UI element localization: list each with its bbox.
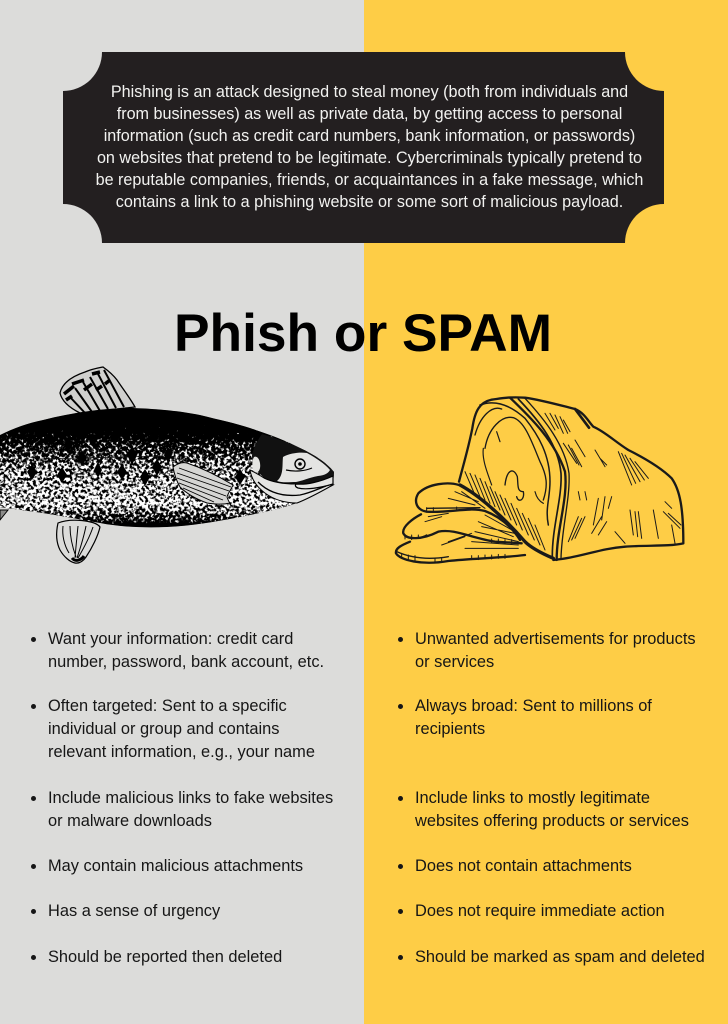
bullet: unwanted advertisements bbox=[415, 628, 696, 674]
pelvic fin bbox=[57, 520, 100, 563]
panel: spam bullet list bbox=[398, 630, 705, 966]
panel: phishing definition plaque bbox=[63, 52, 664, 243]
bullet: always broad bbox=[415, 695, 652, 741]
bullet: want your information bbox=[48, 628, 324, 674]
bullet: often targeted bbox=[48, 695, 315, 764]
icon: spam ham illustration bbox=[394, 396, 684, 564]
lateral line bbox=[40, 456, 165, 459]
pectoral fin bbox=[173, 463, 233, 504]
hatching on the side bbox=[545, 413, 681, 543]
bullet: urgency: Has a sense of urgency bbox=[48, 902, 220, 920]
bullet: unwanted advertisements: Unwanted advertisements for products bbox=[415, 630, 696, 648]
bullet: always broad: recipients bbox=[415, 720, 485, 738]
bullet: want your information: Want your information: credit card bbox=[48, 630, 293, 648]
bullet: malicious attachments: May contain malicious attachments bbox=[48, 857, 303, 875]
dense shadow along slice joint bbox=[460, 485, 553, 558]
bullet: often targeted: Often targeted: Sent to a specific bbox=[48, 697, 287, 715]
tail stub bbox=[0, 510, 8, 520]
head bbox=[252, 434, 334, 485]
bullet: no immediate action: Does not require immediate action bbox=[415, 902, 665, 920]
bullet: want your information: number, password, bank account, etc. bbox=[48, 653, 324, 671]
bullet: unwanted advertisements: or services bbox=[415, 653, 494, 671]
text block: phishing definition: be reputable companies, friends, or acquaintances in a fake message, which bbox=[96, 171, 643, 189]
text block: phishing definition: from businesses) as well as private data, by getting access to personal bbox=[117, 105, 622, 123]
bullet: malicious links bbox=[48, 787, 333, 833]
mouth bbox=[295, 476, 333, 489]
text block: phishing definition bbox=[96, 83, 643, 211]
bullet: legitimate links: Include links to mostly legitimate bbox=[415, 789, 650, 807]
bullet: often targeted: individual or group and contains bbox=[48, 720, 279, 738]
bullet: malicious links: or malware downloads bbox=[48, 812, 212, 830]
bullet: often targeted: relevant information, e.g., your name bbox=[48, 743, 315, 761]
bullet: no attachments: Does not contain attachments bbox=[415, 857, 632, 875]
gill cover crescent bbox=[252, 457, 260, 472]
background: yellow right half bbox=[364, 0, 728, 1024]
body spots bbox=[27, 437, 245, 486]
text block: phishing definition: contains a link to a phishing website or some sort of malicious payload. bbox=[116, 193, 623, 211]
icon: fish illustration bbox=[0, 366, 335, 564]
body with speckled scales bbox=[0, 408, 334, 527]
face bbox=[277, 453, 330, 482]
cut face rings bbox=[510, 398, 566, 560]
bullet: marked as spam: Should be marked as spam and deleted bbox=[415, 948, 705, 966]
bullet: malicious links: Include malicious links to fake websites bbox=[48, 789, 333, 807]
bullet: always broad: Always broad: Sent to millions of bbox=[415, 697, 652, 715]
title: Phish or SPAM bbox=[174, 304, 552, 363]
text block: phishing definition: information (such as credit card numbers, bank information, or passwords) bbox=[104, 127, 635, 145]
ham outline bbox=[459, 397, 683, 560]
bullet: legitimate links: websites offering products or services bbox=[415, 812, 689, 830]
bullet: reported then deleted: Should be reported then deleted bbox=[48, 948, 282, 966]
panel: phish bullet list bbox=[31, 630, 333, 966]
bullet: legitimate links bbox=[415, 787, 689, 833]
eye bbox=[295, 459, 305, 469]
text block: phishing definition: on websites that pretend to be legitimate. Cybercriminals typically pretend to bbox=[97, 149, 642, 167]
dorsal fin bbox=[60, 367, 135, 413]
collar bbox=[250, 470, 333, 503]
slices bbox=[416, 483, 520, 540]
text block: phishing definition: Phishing is an attack designed to steal money (both from individuals and bbox=[111, 83, 628, 101]
slice edge ticks bbox=[402, 507, 512, 562]
